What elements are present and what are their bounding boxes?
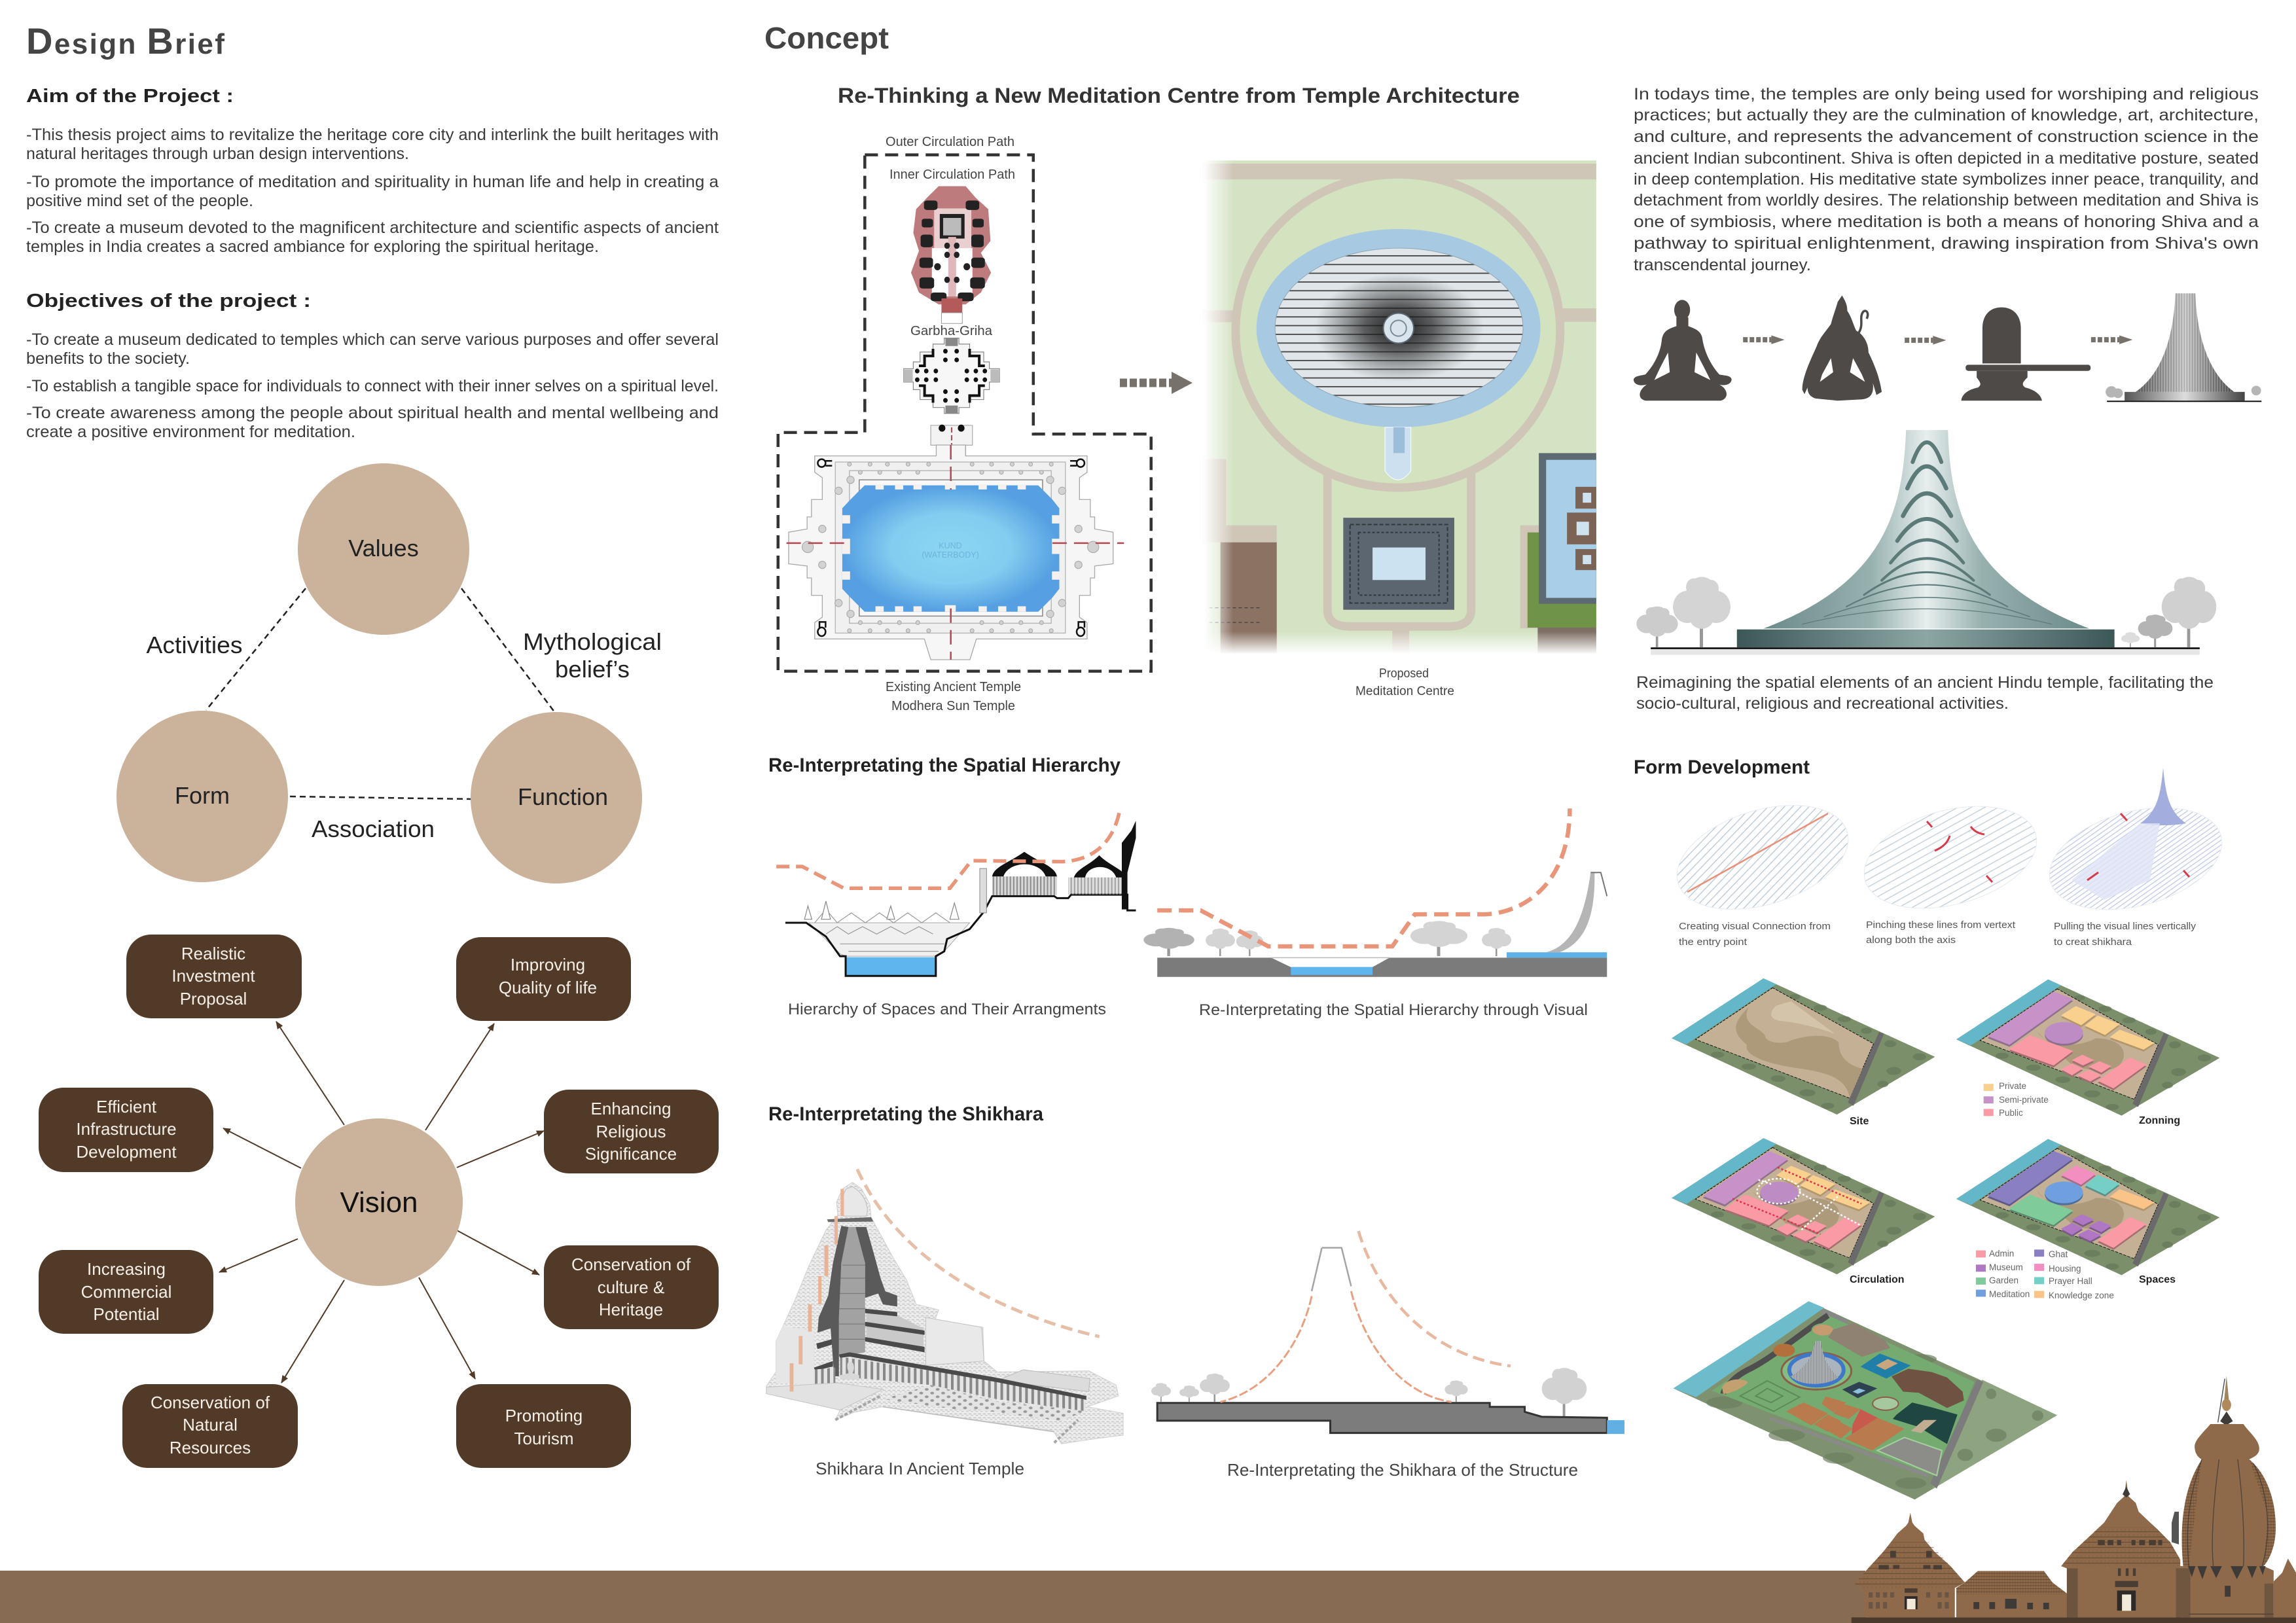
diagram: vision radial [39,935,719,1468]
captions: form steps: Creating visual Connection from [1679,921,1831,932]
box: Promoting Tourism: Tourism [514,1429,574,1448]
label: Mythological belief's: Mythological [523,628,662,655]
iso: zoning [1956,980,2219,1116]
heading: Aim of the Project: Aim of the Project : [26,86,234,107]
square building [1343,518,1454,610]
box: Efficient Infrastructure Development [39,1088,213,1172]
footer band [0,1571,1865,1623]
label: Inner Circulation Path: Inner Circulation Path [889,168,1015,182]
caption: reinterpreted hierarchy: Re-Interpretating the Spatial Hierarchy through Visual [1199,1001,1588,1019]
text block: temples and Shiva: one of symbiosis, where meditation is both a means of honoring Shiva and a [1634,213,2259,231]
plan: inner sanctum [911,187,991,323]
dashed curve [857,1169,1100,1336]
captions: form steps: the entry point [1679,936,1748,948]
legend: zoning: Semi-private [1999,1095,2049,1105]
trees in shikhara section [1151,1368,1587,1417]
box: Conservation of culture and Heritage [544,1245,719,1329]
legend: spaces: Ghat [2049,1249,2068,1259]
label: Association: Association [312,815,435,842]
water channel [1385,427,1411,480]
temple: tall shikhara [2172,1376,2276,1617]
arrows from vision [219,1022,544,1383]
pool block [1860,1353,1911,1379]
text block: aims: -To promote the importance of meditation and spirituality in human life and help in creating a [26,173,719,191]
box: Improving Quality of life: Quality of life [499,978,597,997]
icon: meditating person [1634,300,1732,401]
brown complex [1892,1369,1964,1408]
box: Increasing Commercial Potential: Potential [93,1304,160,1324]
circle: Values: Values [348,535,419,562]
text block: temples and Shiva: detachment from worldly desires. The relationship between meditation and Shiva is [1634,191,2259,209]
tree group left [1636,577,1731,647]
box: Conservation of Natural Resources: Natural [183,1415,238,1435]
text block: aims: positive mind set of the people. [26,192,253,210]
arrow: linga to tower [2091,335,2132,344]
box: Enhancing Religious Significance [544,1090,719,1173]
dark cut section [817,1226,848,1376]
panel: tower elevation [1636,430,2216,713]
text block: temples and Shiva: In todays time, the temples are only being used for worshiping and religious [1634,85,2259,103]
circle: Values [298,463,469,635]
ring garden and tower [1782,1353,1852,1389]
small square [1842,1382,1877,1399]
heading: Concept: Concept [764,21,889,55]
text block: objectives: benefits to the society. [26,349,190,368]
label: Outer Circulation Path: Outer Circulation Path [886,135,1014,149]
text block: objectives [26,330,719,441]
iso: site [1672,978,1935,1115]
box: Realistic Investment Proposal: Realistic [181,944,245,963]
captions: form steps: along both the axis [1866,935,1956,946]
box: Enhancing Religious Significance: Significance [585,1144,677,1164]
box: Conservation of Natural Resources: Resources [170,1438,251,1457]
label: KUND: (WATERBODY) [922,550,979,560]
box: Realistic Investment Proposal: Proposal [180,989,247,1008]
caption: hierarchy: Hierarchy of Spaces and Their Arrangments [788,1001,1106,1018]
box: Increasing Commercial Potential [39,1250,213,1334]
box: Conservation of culture and Heritage: Heritage [599,1300,663,1319]
tree group right [2121,577,2216,647]
caption: reimagining: Reimagining the spatial elements of an ancient Hindu temple, facilitating the [1636,673,2214,692]
plan: kund waterbody [787,445,1124,660]
panel: spatial hierarchy [768,755,1607,1019]
left buildings [1204,459,1226,543]
drawing: temple cutaway [766,1169,1123,1444]
legend: spaces: Meditation [1989,1289,2030,1299]
legend: spaces [1989,1249,2114,1300]
site ground [1712,1315,1974,1476]
floors and colonnade [867,1311,924,1352]
circle: Function: Function [518,783,608,810]
panel: shikhara [766,1103,1624,1480]
right green and pool [1520,525,1539,628]
box: Enhancing Religious Significance: Religious [596,1122,666,1141]
circle: Vision [295,1118,463,1286]
box: Efficient Infrastructure Development: Efficient [96,1097,157,1116]
lower road and forecourt [1327,471,1471,626]
panel: form evolution icons [1634,293,2261,402]
text block: temples and Shiva: and culture, and represents the advancement of construction science in the [1634,128,2259,146]
text block: aims [26,126,719,256]
box: Promoting Tourism [456,1384,631,1468]
text block: aims: -This thesis project aims to revitalize the heritage core city and interlink the built heritages with [26,126,719,144]
heading: form development: Form Development [1634,757,1810,778]
label: Mythological belief's [523,628,662,683]
text block: aims: temples in India creates a sacred ambiance for exploring the spiritual heritage. [26,238,599,256]
plan: garbha griha [904,338,999,414]
trees in reinterpreted section [1143,921,1511,956]
text block: temples and Shiva [1634,85,2259,274]
captions: form steps: to creat shikhara [2054,936,2132,948]
box: Realistic Investment Proposal [126,935,302,1018]
label: iso diagram titles: Circulation [1850,1274,1905,1285]
temple: left shrine [1854,1513,1965,1617]
label: Proposed Meditation Centre [1355,667,1454,698]
circle: Form [117,711,288,882]
river [1674,1301,1824,1397]
label: iso diagram titles [1850,1115,2180,1285]
captions: form steps [1679,919,2197,948]
dashed visual line [776,808,1120,888]
label: Proposed Meditation Centre: Proposed [1379,667,1429,681]
box: Conservation of culture and Heritage: Conservation of [571,1255,691,1274]
temple plan drawing [778,155,1151,671]
circle: Form: Form [175,782,230,809]
icon: Shiva linga [1962,308,2090,401]
box: Conservation of Natural Resources: Conservation of [151,1393,270,1412]
icon: Shiva silhouette [1803,296,1882,401]
dashed circulation outline [778,155,1151,671]
text block: aims: -To create a museum devoted to the magnificent architecture and scientific aspects of ancient [26,219,719,237]
outer ring road [1236,174,1560,488]
striped shikhara roof [1275,248,1523,408]
section: reinterpreted hierarchy [1157,808,1607,977]
temple: far right shrine [2274,1558,2296,1617]
text block: aims: natural heritages through urban design interventions. [26,145,409,163]
legend: spaces: Prayer Hall [2049,1276,2092,1286]
circle: Vision: Vision [340,1186,418,1219]
section: ancient temple hierarchy [776,808,1136,976]
iso: circulation [1672,1138,1935,1274]
text block: temples and Shiva: transcendental journey. [1634,256,1811,274]
text block: objectives: -To establish a tangible space for individuals to connect with their inner selves on a spiritual level. [26,377,719,395]
captions: form steps: Pulling the visual lines vertically [2054,921,2197,932]
box: Conservation of culture and Heritage: culture & [598,1277,664,1297]
text block: temples and Shiva: ancient Indian subcontinent. Shiva is often depicted in a meditative posture, seated [1634,149,2259,168]
box: Improving Quality of life [456,937,631,1021]
heading: shikhara: Re-Interpretating the Shikhara [768,1103,1043,1125]
masterplan isometric [1674,1301,2057,1499]
diagram: values form function triangle [117,463,662,883]
temple: middle shrine [2061,1480,2180,1617]
heading: Objectives of the project: Objectives of the project : [26,291,311,312]
circulation overlay lines [1732,1084,2044,1298]
temple: low hall [1956,1571,2068,1617]
text block: temples and Shiva: pathway to spiritual enlightenment, drawing inspiration from Shiva's own [1634,234,2259,253]
blue moat ring [1257,229,1541,427]
label: Existing Ancient Temple: Existing Ancient Temple [886,680,1021,694]
label: Mythological belief's: belief’s [555,656,630,683]
label: KUND [922,541,979,560]
legend: zoning [1999,1081,2049,1118]
panel: design brief text [26,20,719,441]
text block: temples and Shiva: in deep contemplation. His meditative state symbolizes inner peace, tranquility, and [1634,170,2259,188]
diagram: visual connection ellipse [1664,787,1861,928]
iso diagrams: site, zoning, circulation, spaces [1672,978,2219,1275]
legend: spaces: Admin [1989,1249,2014,1258]
label: Activities: Activities [147,632,242,658]
temple finial [2218,1376,2233,1424]
legend: zoning: Public [1999,1108,2023,1118]
box: Enhancing Religious Significance: Enhancing [591,1099,671,1118]
legend: spaces: Garden [1989,1275,2018,1285]
dark green block [1893,1402,1958,1444]
legend: spaces: Museum [1989,1262,2023,1272]
heading: spatial hierarchy: Re-Interpretating the Spatial Hierarchy [768,755,1121,776]
arrow: Shiva to linga [1905,336,1946,345]
text block: objectives: -To create awareness among the people about spiritual health and mental wellbeing and [26,404,719,422]
circle: Function [471,712,642,883]
label: iso diagram titles: Spaces [2139,1274,2176,1285]
orange height markers [790,1189,844,1391]
caption: reimagining [1636,673,2214,713]
label: iso diagram titles: Zonning [2139,1115,2180,1126]
arrow: plan to proposal [1120,372,1193,394]
panel: form development [1634,757,2233,1300]
legend swatches [1976,1084,2044,1298]
box: Realistic Investment Proposal: Investment [171,966,255,986]
text block: objectives: -To create a museum dedicated to temples which can serve various purposes and offer several [26,330,719,349]
cutaway silhouette [766,1183,1123,1444]
legend: spaces: Knowledge zone [2049,1291,2114,1300]
heading: Design Brief: Design Brief [26,20,226,62]
text block: objectives: create a positive environment for meditation. [26,423,355,441]
land and trees [1674,1301,2057,1499]
label: iso diagram titles: Site [1850,1116,1869,1127]
legend: spaces: Housing [2049,1264,2081,1274]
site plan drawing [1204,160,1596,653]
panel: temple plan [778,135,1151,713]
housing [1828,1323,1890,1357]
label: KUND: KUND [939,541,962,550]
text block: temples and Shiva: practices; but actually they are the culmination of knowledge, art, architecture, [1634,106,2259,124]
captions: form steps: Pinching these lines from vertext [1866,919,2016,931]
stone shaft [839,1227,865,1357]
box: Increasing Commercial Potential: Commercial [81,1282,171,1302]
legend: zoning: Private [1999,1081,2026,1091]
orange buildings [1786,1397,1905,1450]
iso: spaces [1956,1139,2219,1275]
diagram: pulled shikhara surface [2038,768,2233,927]
caption: reinterpreted shikhara: Re-Interpretating the Shikhara of the Structure [1227,1460,1578,1480]
panel: proposed meditation centre site plan [1204,160,1596,698]
label: Modhera Sun Temple: Modhera Sun Temple [891,699,1015,713]
box: Increasing Commercial Potential: Increasing [87,1259,166,1279]
steps above kund [931,425,973,457]
box: Conservation of Natural Resources [122,1384,298,1468]
parking [1877,1437,1942,1476]
caption: shikhara in ancient temple: Shikhara In Ancient Temple [816,1459,1024,1478]
section: reinterpreted shikhara [1157,1231,1624,1434]
arrow: person to Shiva [1743,335,1785,344]
skyline ground [1852,1617,2296,1623]
box: Improving Quality of life: Improving [511,955,585,974]
temple skyline [1852,1376,2296,1623]
icon: small tower elevation [2106,293,2261,402]
box: Efficient Infrastructure Development: Infrastructure [76,1119,177,1139]
tower body [1651,430,2200,655]
diagram: pinching ellipse [1853,789,2048,925]
heading: Re-Thinking: Re-Thinking a New Meditation Centre from Temple Architecture [838,84,1520,107]
label: Garbha-Griha: Garbha-Griha [910,324,993,338]
box: Promoting Tourism: Promoting [505,1406,583,1425]
caption: reimagining: socio-cultural, religious and recreational activities. [1636,694,2009,713]
label: Proposed Meditation Centre: Meditation Centre [1355,685,1454,698]
box: Efficient Infrastructure Development: Development [76,1142,177,1162]
